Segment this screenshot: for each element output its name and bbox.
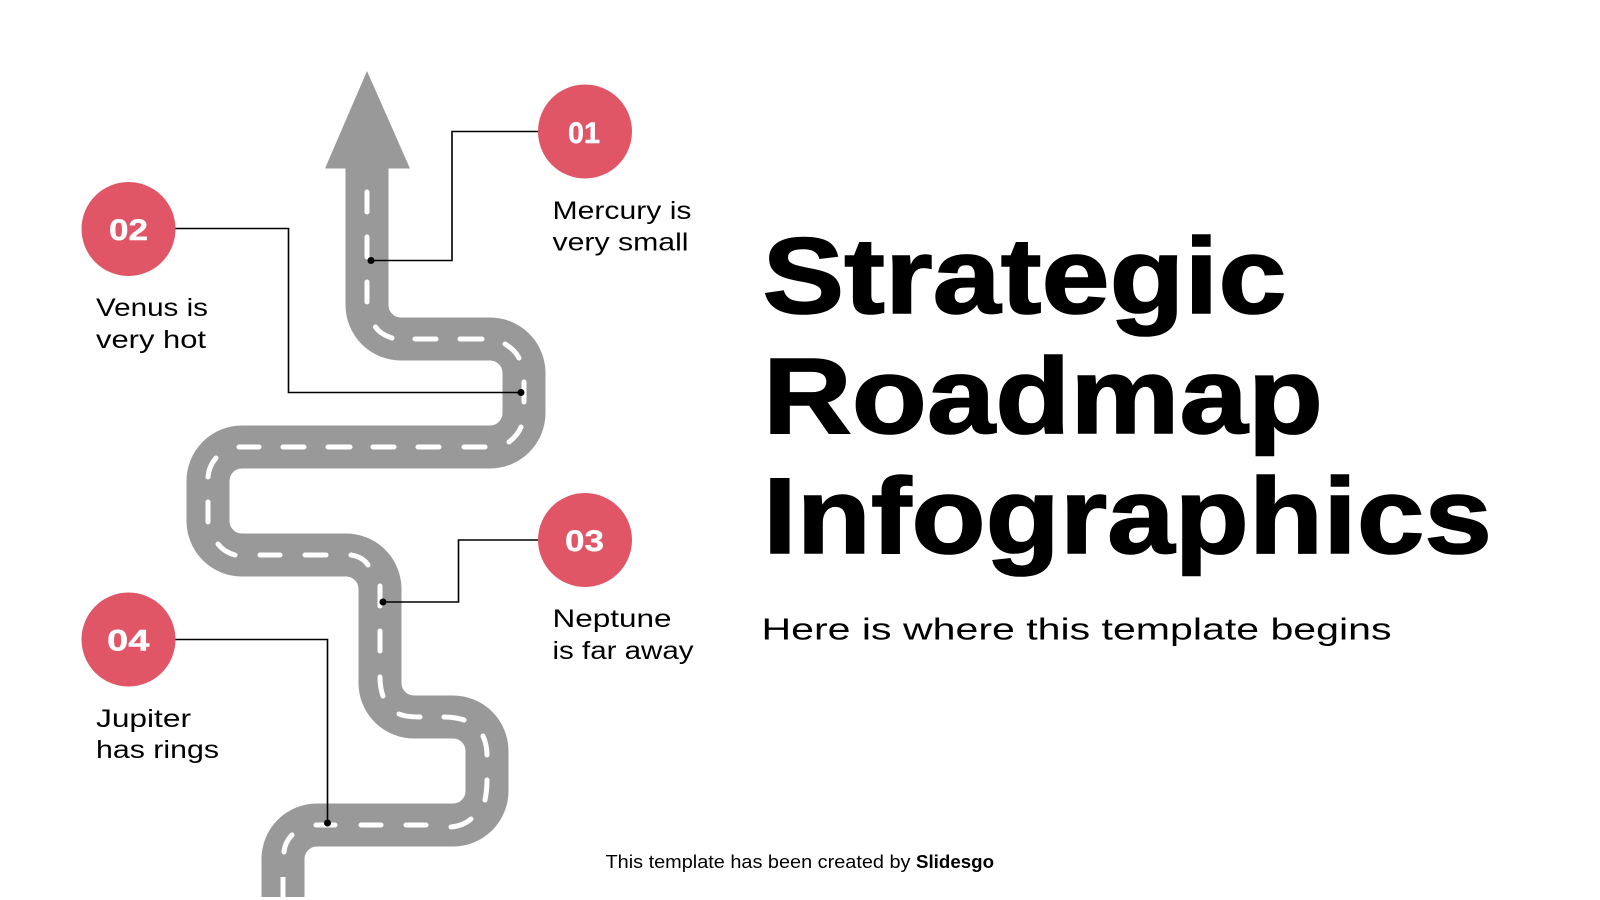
callout 02: Venus xyxy=(82,182,524,396)
connector 03 xyxy=(383,540,540,602)
title: Roadmap xyxy=(763,335,1323,456)
number 01: 01 xyxy=(568,117,600,150)
connector 02 xyxy=(173,228,521,392)
footer credit: Slidesgo xyxy=(916,852,994,872)
callout 03: Neptune xyxy=(380,493,694,665)
connector 04 xyxy=(173,640,328,823)
label 02: Venus is xyxy=(96,294,208,322)
marker dot 03 xyxy=(380,598,386,606)
badge 04 xyxy=(82,592,176,686)
marker dot 04 xyxy=(324,820,331,826)
marker dot 01 xyxy=(368,257,374,264)
label 02: very hot xyxy=(96,326,206,354)
label 03: is far away xyxy=(552,637,694,665)
badge 01 xyxy=(538,84,632,178)
callout 01: Mercury xyxy=(368,84,692,264)
connector 01 xyxy=(371,132,540,260)
title: Strategic xyxy=(762,215,1286,336)
road surface xyxy=(208,165,524,897)
label 01: Mercury is xyxy=(552,197,692,225)
label 03: Neptune xyxy=(552,605,672,633)
label 04: Jupiter xyxy=(96,705,191,733)
road with arrow xyxy=(208,71,524,898)
number 04: 04 xyxy=(107,624,150,658)
badge 02 xyxy=(82,182,176,276)
road centre dashes xyxy=(208,192,524,852)
label 01: very small xyxy=(552,228,688,256)
title: Infographics xyxy=(763,455,1492,576)
badge 03 xyxy=(538,493,632,587)
arrow head xyxy=(325,71,410,168)
label 04: has rings xyxy=(96,736,219,764)
footer credit: This template has been created by xyxy=(606,852,910,872)
number 02: 02 xyxy=(109,214,148,247)
callout 04: Jupiter xyxy=(82,592,331,826)
number 03: 03 xyxy=(565,525,604,558)
marker dot 02 xyxy=(518,389,524,396)
final road dash reaching the page edge of the road xyxy=(280,877,286,898)
subtitle: Here is where this template begins xyxy=(762,612,1392,646)
